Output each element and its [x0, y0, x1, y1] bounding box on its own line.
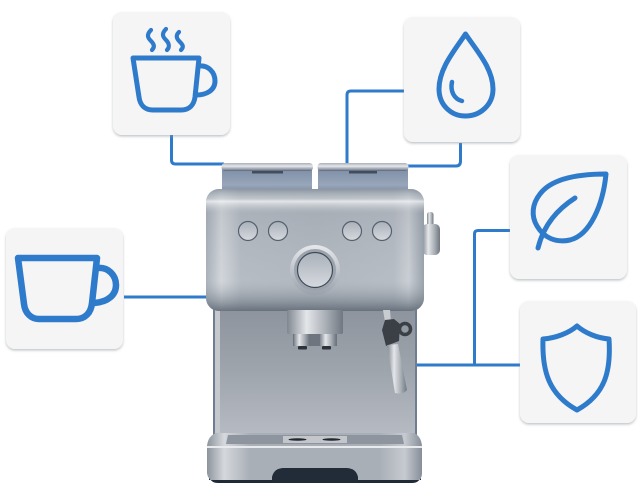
icon: cup — [18, 258, 116, 319]
card: top coffee cup — [113, 12, 230, 135]
espresso machine — [206, 163, 440, 483]
connector: left cup to machine — [124, 296, 208, 298]
card: shield — [520, 301, 636, 423]
card: leaf — [510, 155, 627, 279]
card: left cup — [6, 228, 123, 349]
group head portafilter — [287, 310, 343, 350]
drip tray base — [207, 433, 422, 483]
icon: shield — [543, 326, 609, 410]
connector: leaf card branch — [474, 230, 511, 365]
center dial — [290, 245, 340, 295]
buttons — [238, 222, 392, 240]
card: water drop — [404, 17, 520, 142]
connector: shield card to machine — [416, 364, 521, 366]
left bean hopper — [222, 163, 313, 192]
lower column and recess — [213, 305, 417, 435]
right bean hopper — [318, 163, 408, 192]
upper body — [206, 189, 424, 311]
connector: top cup to left hopper — [172, 135, 224, 164]
icon: steaming cup — [133, 29, 215, 110]
connector lines — [124, 91, 521, 365]
side steam knob — [422, 212, 440, 255]
steam wand — [382, 310, 410, 394]
icon: leaf — [533, 174, 606, 248]
connector: drop card to right hopper — [347, 91, 404, 164]
icon: water drop — [439, 34, 493, 116]
front notch — [272, 468, 358, 483]
connector: drop card to hopper edge — [406, 143, 460, 166]
